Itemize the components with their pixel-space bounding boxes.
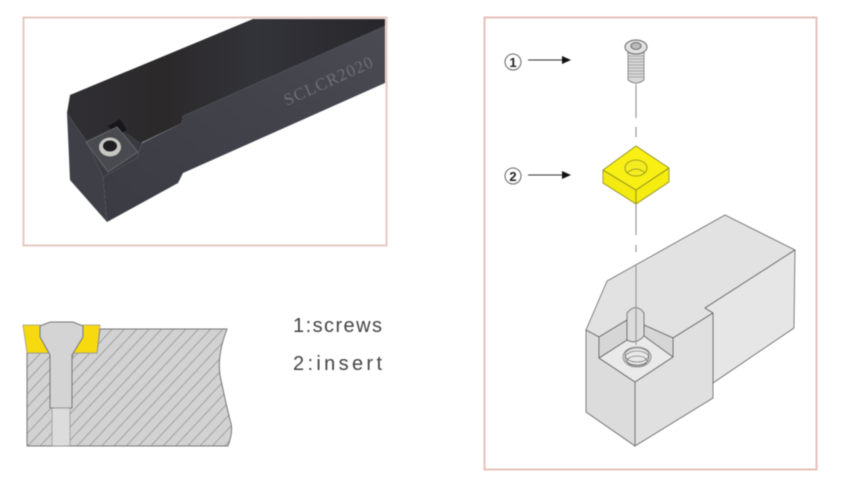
screw hole: [52, 408, 70, 446]
tool holder backing: [87, 127, 142, 177]
tool holder top face: [67, 19, 385, 143]
callout 2: [505, 168, 571, 184]
panel: exploded view: [484, 18, 816, 470]
tool holder front face: [67, 113, 107, 222]
callout 1: 1: [509, 55, 517, 70]
callout 1: [505, 54, 571, 70]
screw section: [40, 322, 83, 408]
panel: product photo: [24, 18, 386, 246]
clamping screw: [99, 138, 121, 156]
callout 2: 2: [509, 169, 517, 184]
cross-section diagram: [23, 322, 232, 446]
icon: yellow insert: [603, 146, 669, 204]
centre line: [635, 84, 637, 252]
threaded hole: [623, 347, 651, 367]
centre line through block: [635, 264, 637, 345]
icon: screw: [625, 40, 647, 83]
legend: insert: 2:insert: [293, 353, 382, 375]
icon: tool holder block: [586, 215, 795, 446]
hatched body: [27, 329, 232, 446]
insert pocket shadow: [108, 119, 127, 136]
tool holder side face: [103, 26, 385, 222]
yellow insert section: [23, 325, 100, 353]
carbide insert: [86, 127, 138, 172]
engraved model code: SCLCR2020: [281, 52, 377, 110]
legend: screws: 1:screws: [293, 315, 382, 337]
